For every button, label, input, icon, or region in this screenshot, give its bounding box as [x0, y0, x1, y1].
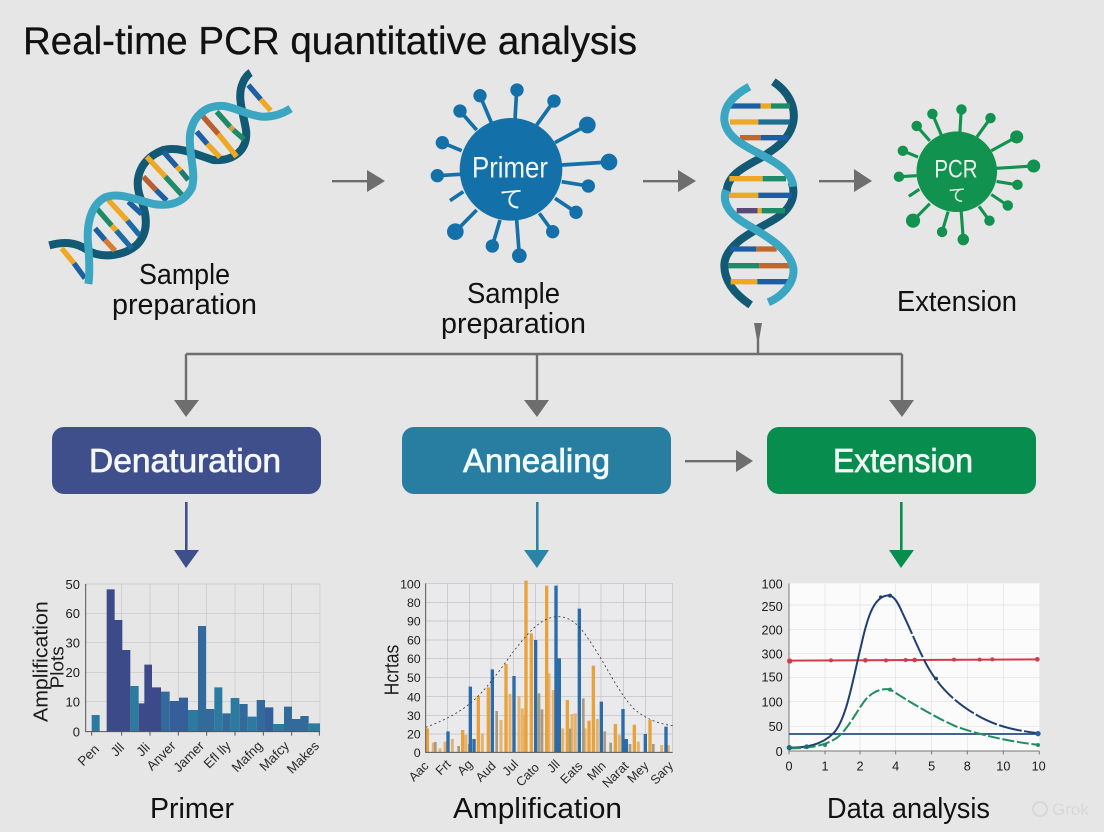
- y axis values: [400, 577, 421, 760]
- bell curve: [426, 617, 673, 727]
- x axis labels: 4: [892, 760, 899, 774]
- y axis title: Amplification: [29, 601, 52, 722]
- y axis title: Hcrtas: [381, 645, 403, 695]
- arrow: annealing down: [524, 502, 549, 568]
- x axis labels: [785, 760, 1046, 774]
- y axis values: 50: [66, 577, 80, 592]
- box: annealing: Annealing: [463, 442, 610, 479]
- x axis labels: 10: [1032, 760, 1046, 774]
- watermark: Grok: [1052, 800, 1089, 819]
- y axis values: 250: [762, 600, 783, 614]
- label: sample preparation 2: [441, 278, 586, 340]
- connector: branching arrows: [174, 323, 914, 417]
- x axis labels: 5: [928, 760, 935, 774]
- label: data analysis: Data analysis: [827, 793, 990, 825]
- x axis labels: Cato: [513, 761, 542, 789]
- icon: diagonal DNA helix: [49, 73, 291, 284]
- y axis values: 100: [762, 695, 783, 709]
- x axis labels: Eats: [558, 759, 585, 787]
- icon: PCR sphere: [894, 104, 1040, 245]
- y axis values: 0: [776, 745, 783, 759]
- chart: primer bar chart: [29, 577, 322, 777]
- x axis labels: Efl lly: [201, 738, 234, 771]
- watermark: [1033, 800, 1089, 819]
- x axis labels: Jul: [500, 757, 521, 779]
- arrow: annealing to extension: [685, 450, 753, 472]
- x axis labels: Sary: [648, 758, 677, 787]
- y axis values: 60: [66, 606, 80, 621]
- y axis values: 100: [762, 578, 783, 592]
- y axis values: 90: [407, 615, 421, 629]
- chart: amplification histogram: [381, 577, 677, 791]
- label: extension top: Extension: [897, 286, 1017, 318]
- x axis labels: Anver: [144, 738, 179, 773]
- bars: [427, 581, 668, 752]
- y axis values: 150: [762, 671, 783, 685]
- y axis title: Plots: [46, 646, 67, 688]
- box: extension: Extension: [833, 442, 973, 479]
- y axis values: 0: [73, 724, 80, 739]
- x axis labels: Jli: [133, 740, 153, 759]
- x axis labels: Aud: [473, 759, 499, 785]
- x axis labels: Jll: [544, 757, 563, 776]
- x axis labels: 0: [785, 760, 793, 774]
- y axis values: 30: [407, 709, 421, 723]
- box: denaturation: [52, 427, 321, 494]
- box: annealing: [402, 427, 671, 494]
- x axis labels: 2: [856, 760, 864, 774]
- y axis values: 20: [66, 665, 80, 680]
- x axis labels: [75, 738, 322, 777]
- icon: vertical DNA helix: [724, 82, 794, 305]
- arrow: denaturation down: [174, 502, 199, 568]
- x axis labels: 8: [964, 760, 971, 774]
- y axis values: 80: [407, 596, 421, 610]
- icon: primer sphere: Primer: [472, 151, 548, 184]
- y axis values: 300: [762, 647, 783, 661]
- y axis values: 20: [407, 728, 421, 742]
- icon: PCR sphere: て: [948, 186, 966, 206]
- icon: primer sphere: [431, 83, 617, 263]
- x axis labels: Mafng: [229, 738, 265, 775]
- icon: PCR sphere: PCR: [934, 155, 978, 183]
- label: sample preparation 1: Sample: [139, 259, 230, 291]
- x axis labels: Pen: [75, 742, 102, 769]
- label: primer: Primer: [150, 793, 234, 825]
- label: sample preparation 1: preparation: [112, 289, 257, 321]
- label: sample preparation 2: Sample: [467, 278, 560, 310]
- arrow: extension down: [889, 502, 914, 568]
- arrow: top 2: [643, 170, 696, 192]
- y axis values: 60: [407, 634, 421, 648]
- x axis labels: Mey: [625, 758, 652, 786]
- x axis labels: Makes: [284, 738, 322, 777]
- label: sample preparation 1: [112, 259, 257, 321]
- arrow: top 3: [819, 169, 872, 192]
- icon: primer sphere: て: [499, 186, 523, 213]
- y axis values: 0: [414, 746, 421, 760]
- y axis values: 100: [400, 577, 421, 591]
- y axis values: 200: [762, 623, 783, 637]
- x axis labels: Aac: [406, 759, 431, 784]
- box: denaturation: Denaturation: [89, 442, 281, 479]
- y axis values: 50: [407, 671, 421, 685]
- y axis values: 50: [769, 720, 783, 734]
- x axis labels: Frt: [433, 757, 454, 778]
- x axis labels: Ag: [455, 757, 475, 778]
- y axis title: [29, 601, 67, 722]
- x axis labels: [406, 757, 677, 791]
- data points: [787, 594, 1041, 750]
- x axis labels: 10: [996, 760, 1010, 774]
- x axis labels: Jamer: [170, 738, 208, 775]
- y axis values: 30: [66, 635, 80, 650]
- x axis labels: Mafcy: [256, 738, 292, 774]
- bars: [92, 589, 320, 732]
- y axis values: 10: [66, 694, 80, 709]
- red line: [787, 657, 1040, 664]
- green curve: [789, 689, 1039, 748]
- x axis labels: Mln: [584, 759, 609, 783]
- box: extension: [767, 427, 1036, 494]
- arrow: top 1: [332, 170, 385, 192]
- y axis values: 40: [407, 690, 421, 704]
- x axis labels: Narat: [600, 759, 632, 791]
- y axis values: 60: [407, 652, 421, 666]
- y axis values: [66, 577, 80, 739]
- baseline threshold: [789, 731, 1039, 736]
- label: sample preparation 2: preparation: [441, 308, 586, 340]
- y axis values: [762, 578, 783, 759]
- navy curve: [789, 595, 1039, 748]
- chart: data analysis line chart: [762, 578, 1046, 774]
- label: amplification: Amplification: [453, 793, 622, 825]
- title: Real-time PCR quantitative analysis: [23, 20, 637, 63]
- x axis labels: 1: [821, 760, 829, 774]
- x axis labels: Jll: [108, 740, 127, 759]
